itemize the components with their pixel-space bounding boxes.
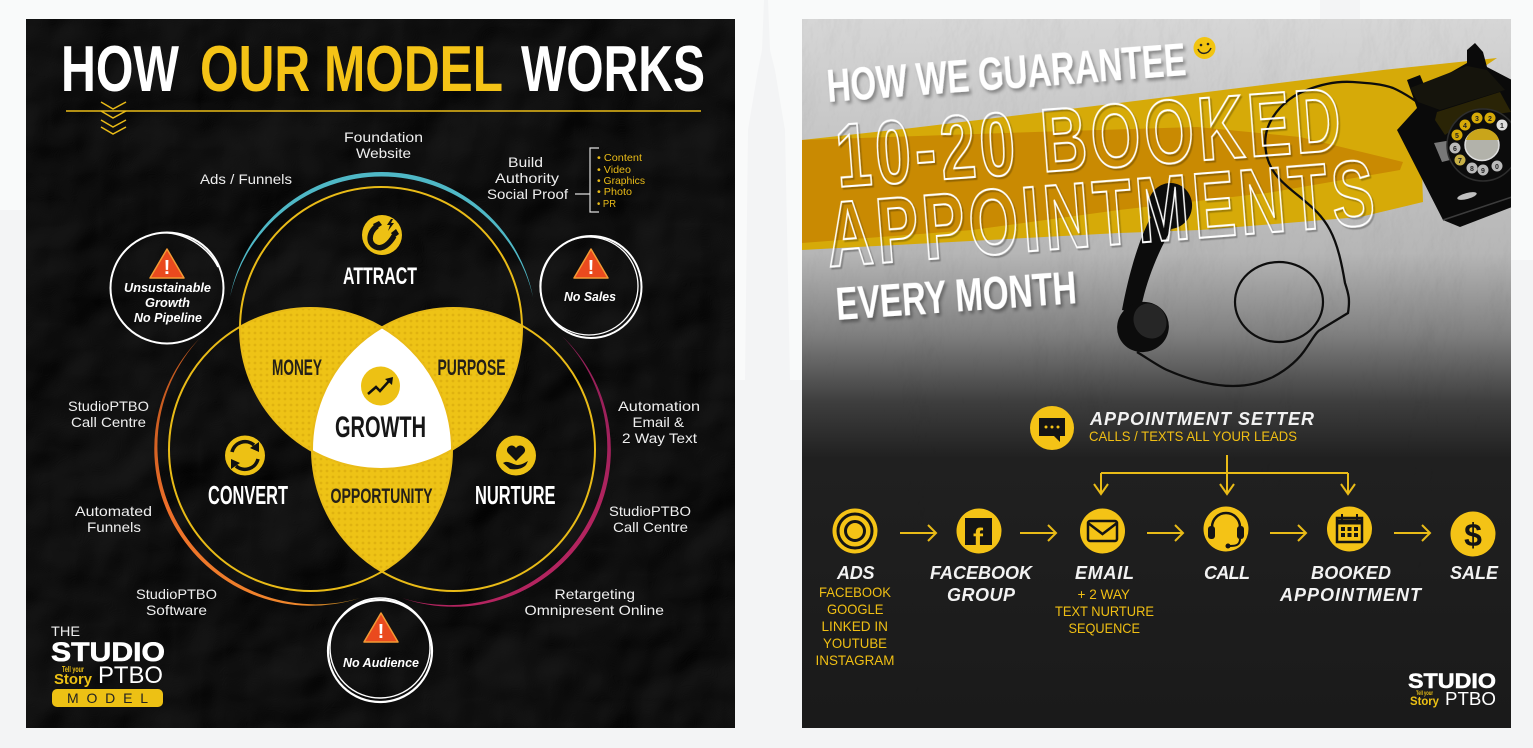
text: appointment setter: APPOINTMENT SETTER (1089, 409, 1314, 429)
text: call centre left: StudioPTBO (68, 398, 149, 414)
centre: growth white (313, 328, 451, 468)
text: foundation website (344, 129, 423, 161)
dial finger holes: 0 (1495, 164, 1499, 171)
callout: no sales (540, 236, 642, 338)
bracket and content list: • PR (597, 198, 616, 210)
logo: studio ptbo model (51, 623, 165, 707)
icon: warning triangle: ! (588, 257, 594, 279)
label: opportunity: OPPORTUNITY (330, 485, 432, 508)
icon: dollar: $ (1464, 517, 1482, 553)
dial finger holes: 4 (1463, 123, 1467, 130)
icon: smiley (1194, 37, 1216, 59)
step: sale (1450, 512, 1499, 583)
panel: how we guarantee appointments (802, 19, 1519, 728)
icon: calendar (1327, 506, 1372, 552)
logo: studio ptbo: STUDIO (1408, 670, 1496, 693)
lens: purpose (384, 309, 521, 448)
step: facebook group (930, 508, 1034, 605)
telephone photo (1110, 43, 1519, 386)
label: attract: ATTRACT (343, 263, 417, 290)
callout: no audience (328, 598, 432, 702)
icon: warning triangle: ! (378, 621, 384, 643)
label: purpose: PURPOSE (438, 355, 506, 380)
rotary phone body (1397, 43, 1519, 227)
handset (1117, 183, 1192, 352)
bracket and content list: • Content (597, 152, 642, 164)
arrow: ads to facebook (900, 525, 936, 541)
text: software (136, 586, 217, 618)
icon: facebook: f (973, 523, 984, 556)
arrow: call to booked (1270, 525, 1306, 541)
dial finger holes: 5 (1455, 133, 1459, 140)
arrows: setter to email, call, booked (1094, 455, 1355, 494)
step: ads (816, 508, 894, 668)
step: ads: ADS (836, 563, 874, 583)
text: software: Software (146, 602, 207, 618)
logo: studio ptbo: Story (1410, 694, 1439, 708)
step: ads: LINKED IN (822, 618, 888, 634)
yellow paint stripe (802, 58, 1497, 250)
step: email: TEXT NURTURE (1055, 603, 1154, 619)
text: call centre right: StudioPTBO (609, 503, 691, 519)
text: retargeting (524, 586, 664, 618)
dial finger holes: 2 (1488, 116, 1492, 123)
text: foundation website: Website (356, 145, 411, 161)
outer arc: convert orange (154, 338, 360, 606)
text: call centre left (68, 398, 149, 430)
text: foundation website: Foundation (344, 129, 423, 145)
icon: nurture heart in hand (496, 436, 536, 476)
bracket and content list: • Video (597, 164, 631, 176)
outer arc: attract teal (230, 172, 533, 297)
step: booked appointment: APPOINTMENT (1279, 585, 1423, 605)
step: booked appointment (1279, 506, 1423, 605)
logo: studio ptbo: PTBO (1445, 689, 1496, 709)
step: facebook group: FACEBOOK (930, 563, 1034, 583)
title divider with chevrons (66, 102, 701, 134)
logo: studio ptbo model: Story (54, 671, 93, 688)
logo: studio ptbo: Tell your (1416, 690, 1433, 697)
step: booked appointment: BOOKED (1311, 563, 1391, 583)
dial finger holes: 7 (1458, 158, 1462, 165)
heading: every month: EVERY MONTH (834, 261, 1078, 330)
text: automation: 2 Way Text (622, 430, 697, 446)
text: software: StudioPTBO (136, 586, 217, 602)
step: email: SEQUENCE (1068, 620, 1140, 636)
callout: no sales: No Sales (564, 289, 616, 304)
text: call centre left: Call Centre (71, 414, 146, 430)
callout: unsustainable growth: Unsustainable (124, 280, 211, 295)
step: ads: YOUTUBE (823, 635, 887, 651)
logo: studio ptbo model: MODEL (67, 690, 148, 706)
text: automated funnels: Funnels (87, 519, 141, 535)
panel: how our model works (26, 19, 735, 728)
label: convert: CONVERT (208, 480, 288, 510)
step: email: EMAIL (1075, 563, 1134, 583)
icon: headset (1204, 506, 1248, 552)
arrow: email to call (1147, 525, 1183, 541)
lens: opportunity (313, 452, 451, 570)
icon: target (832, 508, 878, 554)
text: retargeting: Retargeting (554, 586, 635, 602)
icon: convert cycle (225, 436, 265, 476)
logo: studio ptbo (1408, 673, 1496, 708)
outer arc: nurture magenta (402, 336, 611, 607)
dial finger holes: 8 (1470, 166, 1474, 173)
text: appointment setter: CALLS / TEXTS ALL YOUR LEADS (1089, 428, 1297, 444)
heading: how we guarantee: HOW WE GUARANTEE (825, 33, 1188, 112)
step: call: CALL (1204, 563, 1250, 583)
text: build authority social proof: Build (508, 154, 543, 170)
circle outlines (169, 187, 595, 591)
text: build authority social proof: Authority (495, 170, 559, 186)
cord (1137, 82, 1417, 386)
text: automation: Automation (618, 398, 700, 414)
bracket and content list (575, 148, 645, 212)
label: money: MONEY (272, 355, 322, 380)
bracket and content list: • Photo (597, 186, 632, 198)
cord loop (1235, 262, 1323, 342)
text: automation: Email & (632, 414, 685, 430)
title: how our model works: OUR MODEL (200, 32, 503, 105)
logo: studio ptbo model: Tell your (62, 664, 84, 674)
text: build authority social proof: Social Proof (487, 186, 568, 202)
icon: appointment setter chat (1030, 406, 1074, 450)
venn diagram (154, 172, 611, 607)
text: automation (618, 398, 700, 446)
text: appointment setter (1090, 412, 1314, 441)
arrow: facebook to email (1020, 525, 1056, 541)
step: email: + 2 WAY (1078, 586, 1131, 602)
step: sale: SALE (1450, 563, 1499, 583)
step: facebook group: GROUP (947, 585, 1016, 605)
label: growth: GROWTH (335, 411, 426, 444)
callout: unsustainable growth: No Pipeline (134, 310, 202, 325)
title: how our model works (61, 32, 705, 105)
arrow: booked to sale (1394, 525, 1430, 541)
callout: unsustainable growth: Growth (145, 295, 190, 310)
icon: envelope (1080, 508, 1125, 554)
dial finger holes: 1 (1500, 123, 1504, 130)
text: call centre right (609, 503, 691, 535)
icon: warning triangle: ! (164, 257, 170, 279)
step: ads: GOOGLE (827, 601, 884, 617)
logo: studio ptbo model: THE (51, 623, 80, 639)
callout: unsustainable growth (110, 232, 224, 344)
text: call centre right: Call Centre (613, 519, 688, 535)
text: build authority social proof (487, 154, 568, 202)
text: automated funnels (75, 503, 152, 535)
step: ads: INSTAGRAM (816, 652, 894, 668)
title: how our model works: HOW (61, 32, 179, 105)
logo: studio ptbo model: STUDIO (51, 637, 165, 667)
step: email (1055, 508, 1154, 636)
logo: studio ptbo model: PTBO (98, 662, 163, 689)
icon: attract magnet (362, 215, 402, 255)
dial finger holes: 9 (1481, 168, 1485, 175)
title: how our model works: WORKS (521, 32, 705, 105)
callout: no audience: No Audience (343, 655, 419, 670)
dial finger holes (1450, 112, 1508, 176)
dial finger holes: 6 (1453, 146, 1457, 153)
step: call (1204, 506, 1250, 583)
icon: growth chart (361, 366, 400, 406)
text: ads funnels: Ads / Funnels (200, 171, 292, 187)
dial finger holes: 3 (1475, 116, 1479, 123)
bracket and content list: • Graphics (597, 175, 645, 187)
text: retargeting: Omnipresent Online (524, 602, 664, 618)
text: automated funnels: Automated (75, 503, 152, 519)
label: nurture: NURTURE (475, 480, 556, 510)
step: ads: FACEBOOK (819, 584, 892, 600)
lens: money (241, 309, 380, 450)
